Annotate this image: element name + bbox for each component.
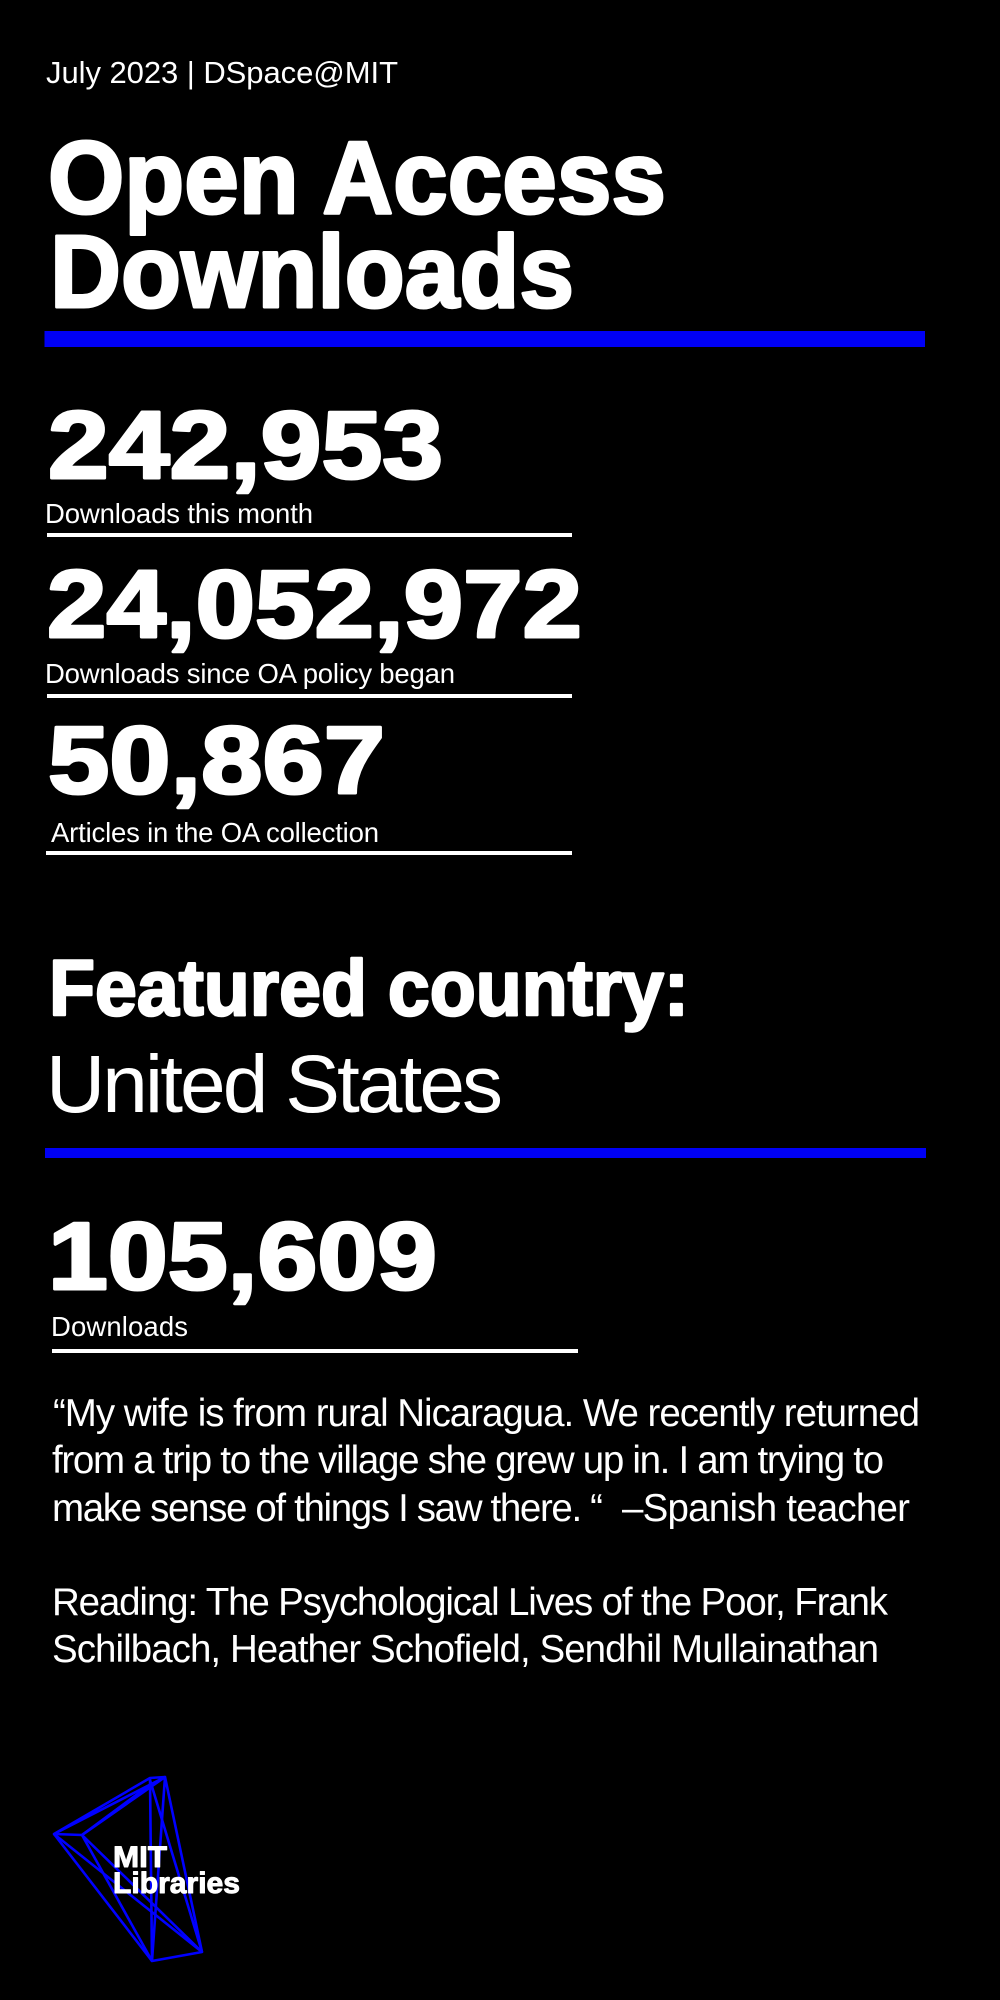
title [48, 120, 666, 329]
quote text: “My wife is from rural Nicaragua. We recently returned [53, 1392, 920, 1435]
stat: featured country downloads [48, 1203, 578, 1353]
heading: featured country: Featured country: [49, 943, 689, 1032]
MIT Libraries logo [54, 1777, 240, 1961]
stat: downloads since OA policy began [45, 551, 582, 698]
stat: articles in the OA collection: Articles in the OA collection [51, 817, 379, 848]
stat: articles in the OA collection [46, 707, 572, 855]
stat: downloads this month [45, 392, 572, 537]
featured country divider: blue bar [45, 1148, 926, 1158]
quote text: from a trip to the village she grew up in. I am trying to [52, 1439, 884, 1482]
stat: featured country downloads: Downloads [51, 1311, 188, 1342]
icon: blue wireframe polyhedron [54, 1777, 202, 1961]
title divider: blue bar [44, 331, 925, 347]
stat: downloads this month: 242,953 [48, 392, 443, 499]
stat: featured country downloads: 105,609 [48, 1203, 437, 1310]
quote text: make sense of things I saw there. “ [52, 1487, 603, 1530]
stat: downloads since OA policy began: 24,052,972 [47, 551, 582, 658]
heading: featured country: United States [46, 1039, 503, 1130]
title: Downloads [50, 214, 574, 329]
logo wordmark [113, 1841, 240, 1900]
heading: featured country [46, 943, 689, 1130]
quote text: –Spanish teacher [622, 1487, 910, 1530]
stat: articles in the OA collection: 50,867 [48, 707, 385, 814]
stat: downloads since OA policy began: Downloads since OA policy began [45, 658, 455, 689]
quote text [52, 1392, 920, 1530]
logo wordmark: Libraries [113, 1867, 240, 1900]
header: date and source: July 2023 | DSpace@MIT [46, 55, 398, 90]
reading citation [52, 1581, 889, 1671]
reading citation: Schilbach, Heather Schofield, Sendhil Mullainathan [52, 1628, 879, 1671]
reading citation: Reading: The Psychological Lives of the Poor, Frank [52, 1581, 889, 1624]
title: Open Access [48, 120, 666, 235]
logo wordmark: MIT [113, 1841, 167, 1874]
stat: downloads this month: Downloads this month [45, 498, 313, 529]
